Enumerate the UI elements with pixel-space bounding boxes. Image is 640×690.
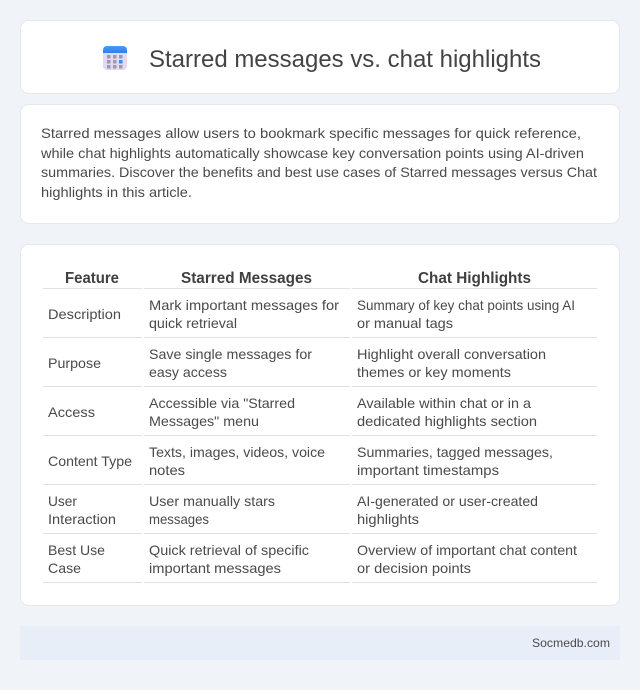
table row: content type: Content Type [48, 453, 132, 469]
table header row [65, 270, 531, 287]
table header row: Feature [65, 270, 119, 287]
panel: introduction [20, 104, 620, 224]
table row: purpose: Save single messages for [149, 346, 312, 362]
table row: content type: Summaries, tagged messages, [357, 444, 553, 460]
table row: user interaction [48, 493, 538, 527]
table row: best use case: Quick retrieval of specific [149, 542, 309, 558]
table row: description: or manual tags [357, 315, 453, 331]
table row: best use case: Overview of important chat content [357, 542, 577, 558]
table row: user interaction: User manually stars [149, 493, 275, 509]
table row: access: Accessible via "Starred [149, 395, 295, 411]
table row: description: quick retrieval [149, 315, 237, 331]
table row: access: Access [48, 404, 95, 420]
table row: user interaction: highlights [357, 511, 419, 527]
table row: content type: Texts, images, videos, voice [149, 444, 325, 460]
table row: purpose: Highlight overall conversation [357, 346, 546, 362]
table row: description: Summary of key chat points using AI [357, 297, 575, 313]
table row: best use case: or decision points [357, 560, 471, 576]
footer bar [20, 626, 620, 660]
text block: intro paragraph [40, 125, 597, 200]
footer text: Socmedb.com [532, 636, 610, 650]
table row: best use case [48, 542, 577, 576]
table row: best use case: Case [48, 560, 81, 576]
table row: best use case: Best Use [48, 542, 105, 558]
text block: intro paragraph: highlights in this article. [41, 184, 192, 200]
table row: description: Description [48, 306, 121, 322]
table row: user interaction: AI-generated or user-created [357, 493, 538, 509]
table row: content type: important timestamps [357, 462, 499, 478]
text block: intro paragraph: while chat highlights automatically showcase key conversation points using AI-driven [40, 145, 584, 161]
table row: purpose: themes or key moments [357, 364, 511, 380]
table row: user interaction: messages [149, 511, 209, 527]
table row: access: dedicated highlights section [357, 413, 537, 429]
panel: comparison table [20, 244, 620, 606]
table row: best use case: important messages [149, 560, 281, 576]
table row: user interaction: User [48, 493, 77, 509]
panel: title card [20, 20, 620, 94]
table row: description [48, 297, 575, 331]
text block: intro paragraph: summaries. Discover the benefits and best use cases of Starred messages versus Chat [41, 164, 597, 180]
table row: content type [48, 444, 553, 478]
table header row: Chat Highlights [418, 270, 531, 287]
table row: purpose: easy access [149, 364, 227, 380]
table row: content type: notes [149, 462, 185, 478]
table row: description: Mark important messages for [149, 297, 339, 313]
title: Starred messages vs. chat highlights [149, 46, 541, 73]
table header row: Starred Messages [181, 270, 312, 287]
table row: purpose [48, 346, 546, 380]
table row: access: Messages" menu [149, 413, 259, 429]
text block: intro paragraph: Starred messages allow users to bookmark specific messages for quick reference, [41, 125, 581, 141]
table row: user interaction: Interaction [48, 511, 116, 527]
table row: purpose: Purpose [48, 355, 101, 371]
table row: access: Available within chat or in a [357, 395, 531, 411]
icon: calendar [103, 46, 127, 70]
table row: access [48, 395, 537, 429]
